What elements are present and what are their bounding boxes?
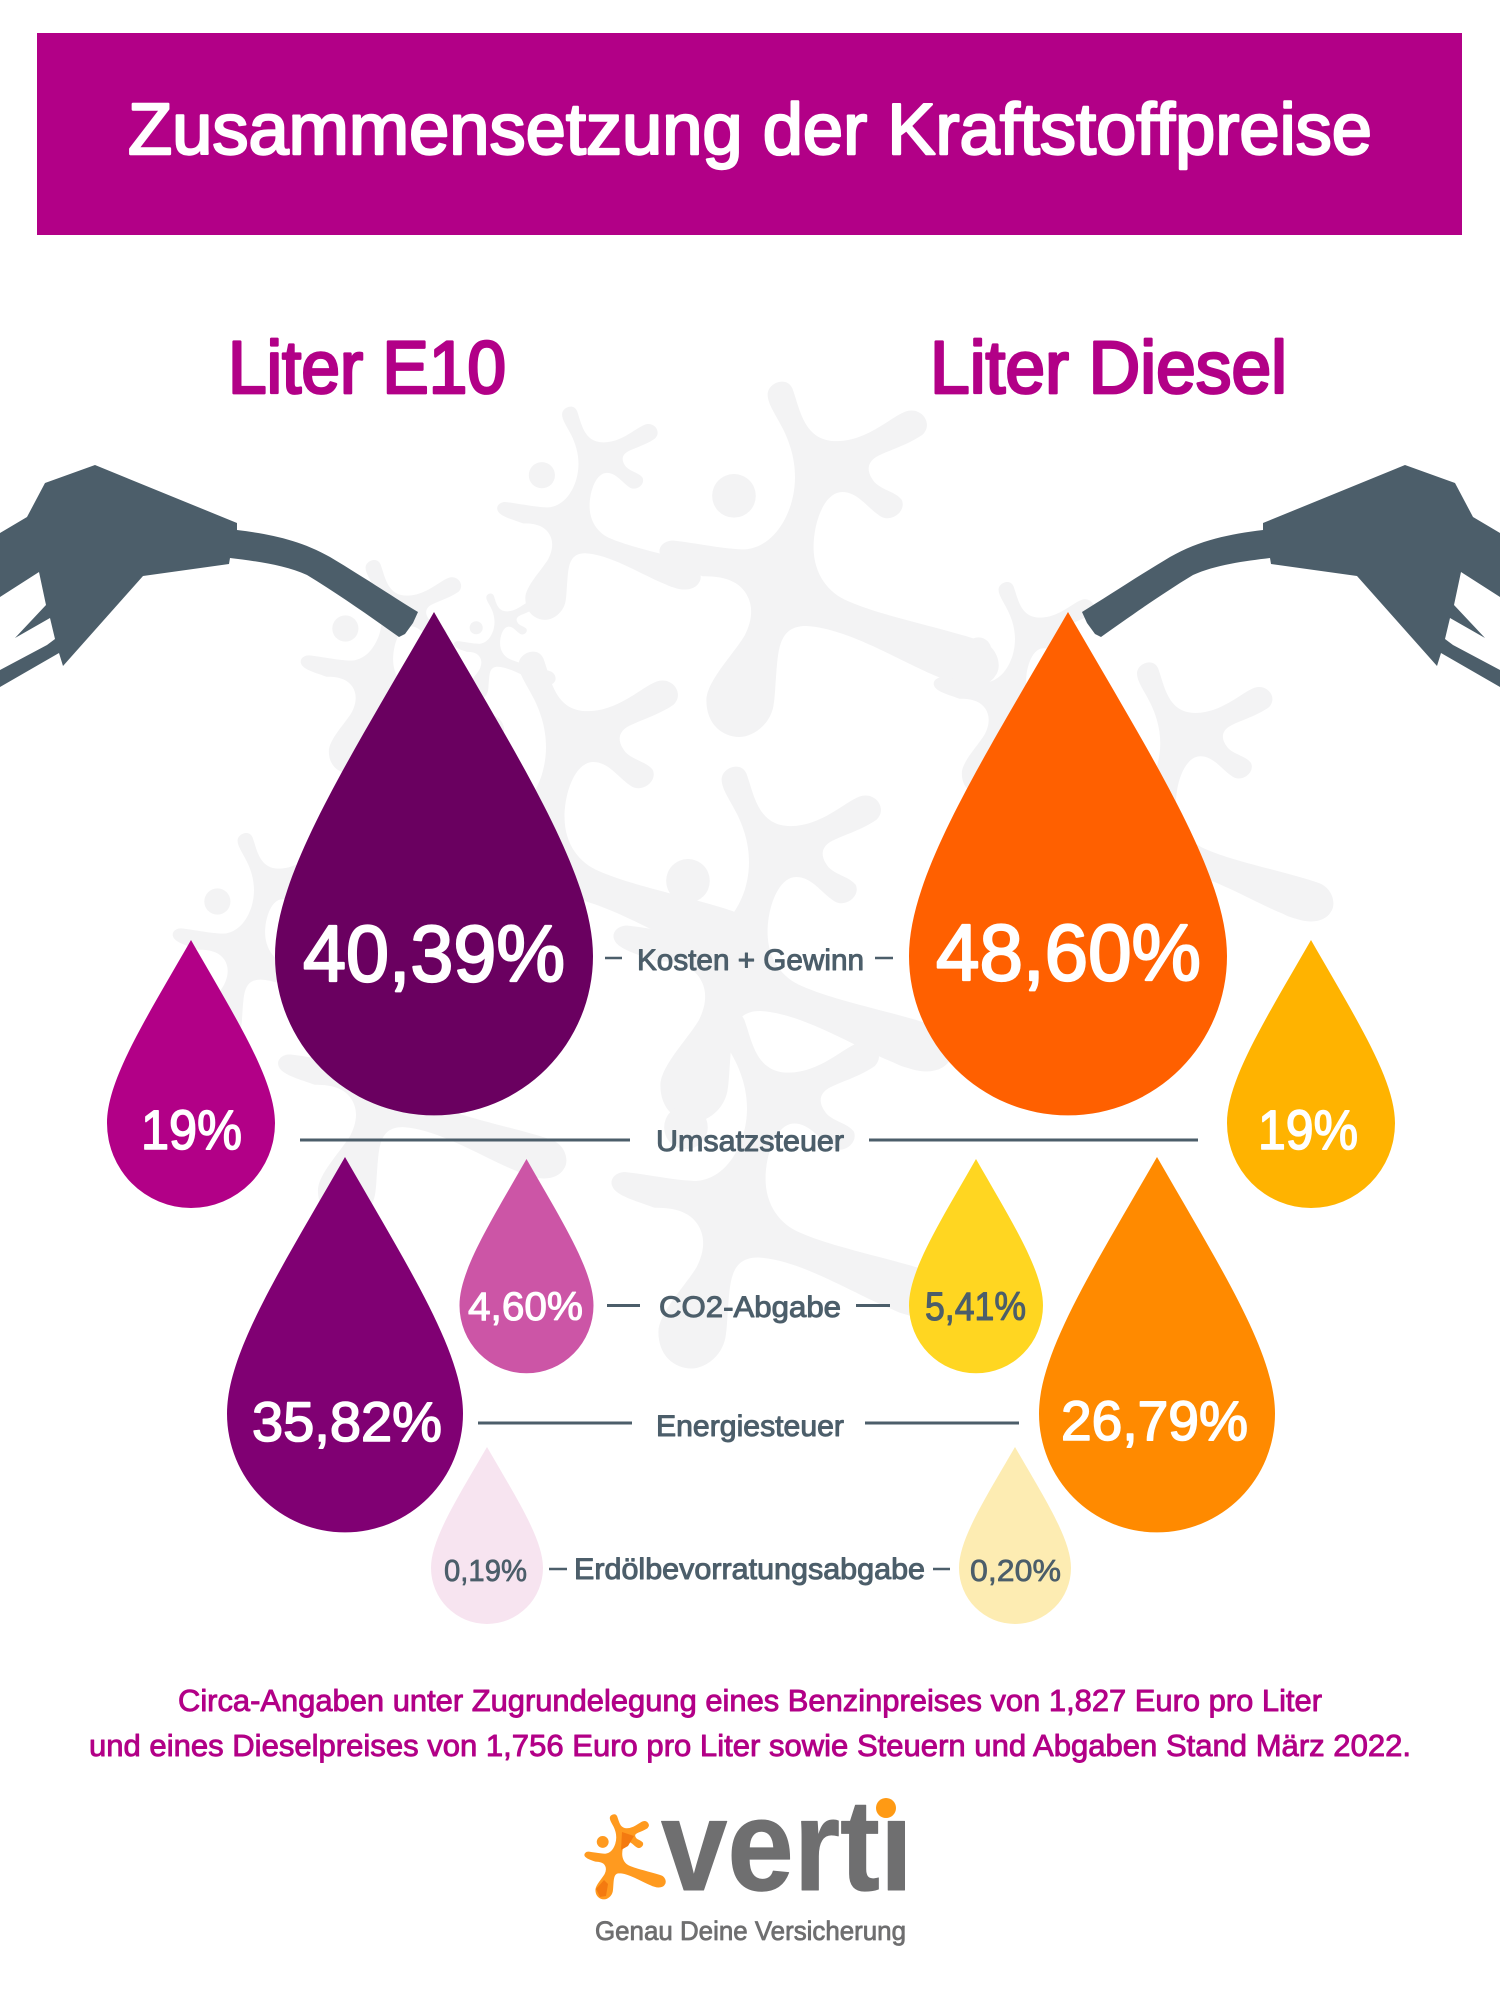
- title banner: [37, 33, 1462, 235]
- icon: left fuel nozzle: [0, 465, 418, 687]
- footnote: und eines Dieselpreises von 1,756 Euro pro Liter sowie Steuern und Abgaben Stand März 2022.: [89, 1728, 1411, 1763]
- icon: verti figure: [585, 1815, 665, 1899]
- drop: Diesel Kosten + Gewinn: 48,60%: [936, 908, 1201, 997]
- label row: CO2-Abgabe: CO2-Abgabe: [659, 1291, 841, 1324]
- drop: E10 CO2-Abgabe: [460, 1159, 594, 1373]
- drop: Diesel Energiesteuer: 26,79%: [1061, 1389, 1248, 1452]
- drop: E10 Kosten + Gewinn: [275, 612, 593, 1115]
- footnote: [89, 1683, 1411, 1763]
- drop: E10 Energiesteuer: [227, 1157, 463, 1532]
- label row: Energiesteuer: Energiesteuer: [656, 1410, 844, 1443]
- drop: Diesel CO2-Abgabe: 5,41%: [925, 1285, 1026, 1329]
- heading: Liter E10: Liter E10: [228, 326, 506, 409]
- logo: verti: [585, 1772, 913, 1946]
- label row: Erdölbevorratungsabgabe: Erdölbevorratungsabgabe: [574, 1553, 925, 1586]
- drop: Diesel Erdölbevorratungsabgabe: 0,20%: [970, 1553, 1061, 1588]
- drop: E10 Umsatzsteuer: 19%: [141, 1098, 242, 1161]
- logo: verti: Genau Deine Versicherung: [595, 1916, 906, 1946]
- drop: Diesel CO2-Abgabe: [909, 1159, 1043, 1373]
- drop: E10 Erdölbevorratungsabgabe: 0,19%: [444, 1553, 527, 1588]
- drop: Diesel Kosten + Gewinn: [909, 612, 1227, 1115]
- drop: Diesel Erdölbevorratungsabgabe: [959, 1447, 1071, 1624]
- drop: Diesel Umsatzsteuer: [1227, 940, 1395, 1208]
- heading: Liter Diesel: Liter Diesel: [930, 326, 1287, 409]
- drop: E10 Kosten + Gewinn: 40,39%: [303, 909, 565, 998]
- drop: Diesel Energiesteuer: [1039, 1157, 1275, 1532]
- title: Zusammensetzung der Kraftstoffpreise: [128, 90, 1372, 170]
- label row: Umsatzsteuer: Umsatzsteuer: [656, 1125, 844, 1158]
- icon: right fuel nozzle: [1082, 465, 1500, 687]
- logo: verti: verti: [661, 1772, 913, 1918]
- drop: E10 Energiesteuer: 35,82%: [252, 1390, 442, 1453]
- drop: Diesel Umsatzsteuer: 19%: [1258, 1098, 1358, 1161]
- label row: Kosten + Gewinn: Kosten + Gewinn: [637, 944, 864, 977]
- drop: E10 Erdölbevorratungsabgabe: [431, 1447, 543, 1624]
- drop: E10 Umsatzsteuer: [107, 940, 275, 1208]
- drop: E10 CO2-Abgabe: 4,60%: [468, 1285, 583, 1329]
- footnote: Circa-Angaben unter Zugrundelegung eines Benzinpreises von 1,827 Euro pro Liter: [178, 1683, 1322, 1718]
